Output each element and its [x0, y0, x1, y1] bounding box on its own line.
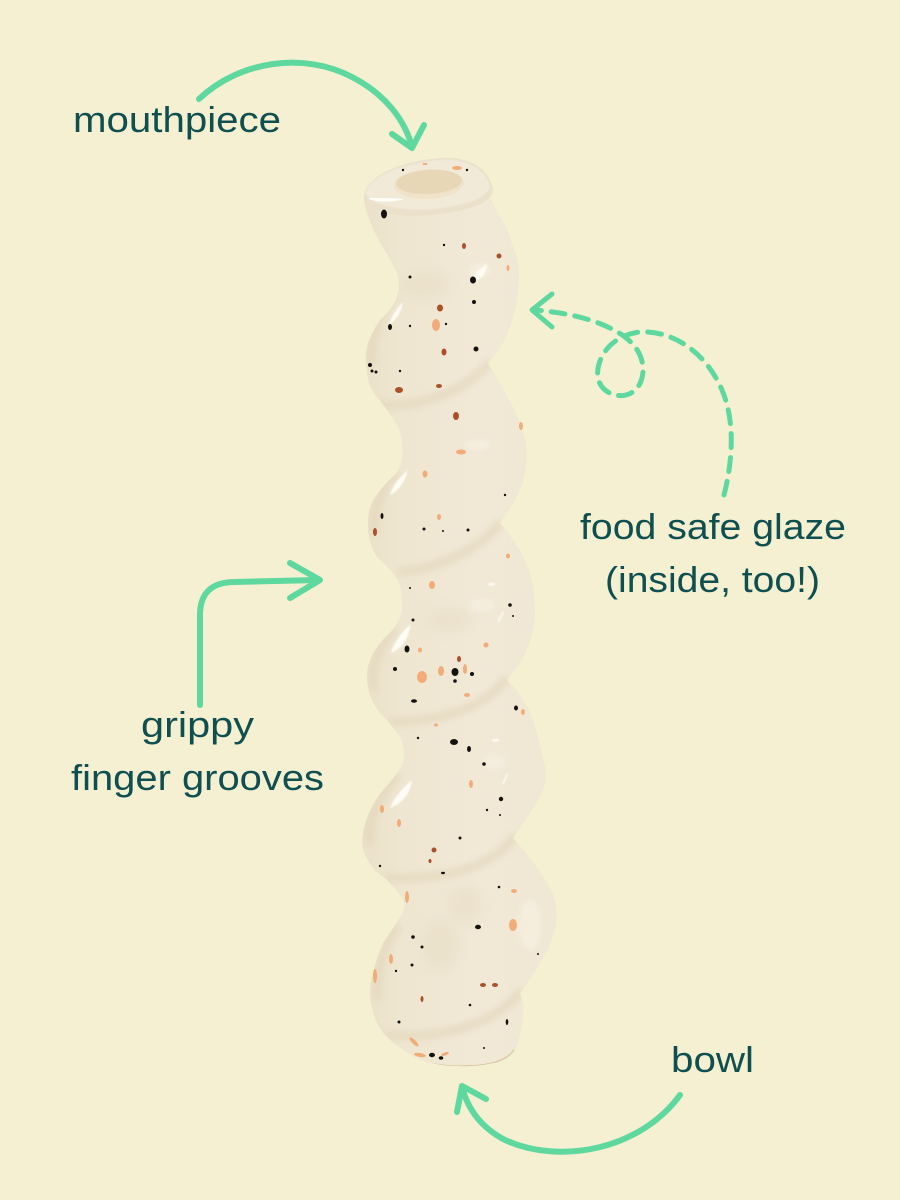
arrow: mouthpiece — [199, 63, 424, 148]
label: grippy finger grooves: finger grooves — [71, 757, 324, 798]
label: food safe glaze — [580, 506, 846, 600]
label: grippy finger grooves — [71, 704, 324, 798]
label: mouthpiece: mouthpiece — [73, 99, 281, 140]
label: food safe glaze: (inside, too!) — [605, 559, 820, 600]
groove shading — [369, 293, 522, 1036]
ceramic pipe photo illustration — [362, 158, 557, 1066]
arrow: food safe glaze (dashed loop) — [532, 294, 731, 495]
bottom edge — [412, 1050, 514, 1066]
speckles — [368, 163, 539, 1060]
label: grippy finger grooves: grippy — [141, 704, 254, 745]
arrow: bowl — [457, 1086, 680, 1152]
label: food safe glaze: food safe glaze — [580, 506, 846, 547]
arrow: grippy finger grooves — [200, 563, 320, 705]
specular glints — [389, 264, 508, 808]
broad tonal patches — [432, 618, 474, 958]
soft body highlights — [470, 267, 539, 948]
label: bowl: bowl — [671, 1039, 754, 1080]
rim top and bowl opening — [364, 158, 493, 216]
